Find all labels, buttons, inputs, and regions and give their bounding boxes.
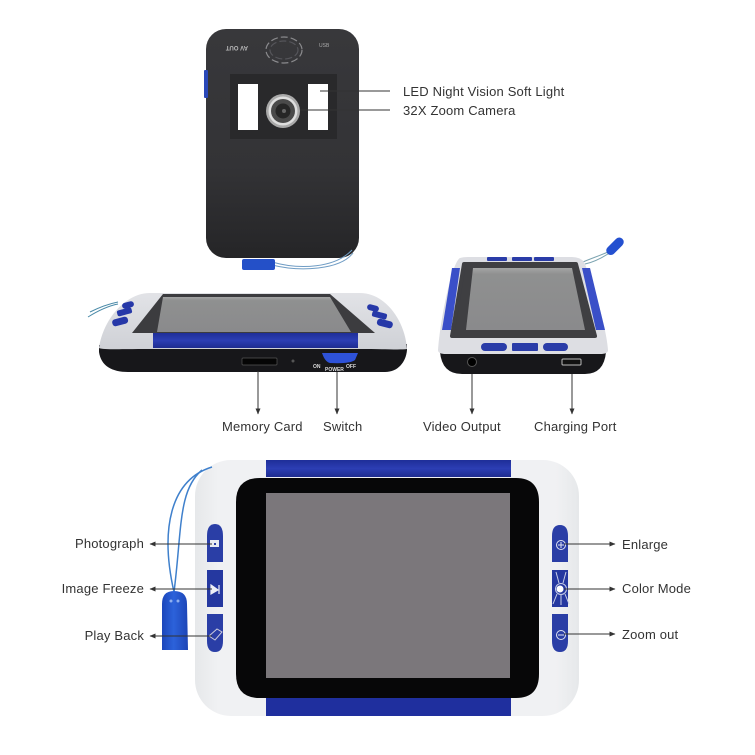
buttons — [481, 257, 568, 351]
label: Image Freeze: Image Freeze — [62, 581, 144, 596]
arrow: photograph — [150, 543, 212, 545]
arrow: memory card — [257, 371, 259, 414]
device: side view: ON — [313, 364, 321, 370]
label: Switch: Switch — [323, 419, 362, 434]
speaker grille — [266, 37, 302, 63]
label: Charging Port: Charging Port — [534, 419, 617, 434]
LED right — [308, 84, 328, 130]
audio jack — [468, 358, 476, 366]
device: side view — [88, 293, 407, 373]
icon: color mode — [553, 572, 569, 605]
icon: zoom out — [556, 630, 566, 640]
label: Memory Card: Memory Card — [222, 419, 303, 434]
device: front view — [162, 460, 579, 716]
side buttons — [111, 301, 394, 329]
icon: play back — [209, 629, 222, 640]
device: front end view — [438, 236, 626, 374]
side button strip — [204, 70, 208, 98]
arrow: switch — [336, 372, 338, 414]
arrow: color mode — [564, 588, 615, 590]
arrow: zoom out — [564, 633, 615, 635]
usb port — [562, 359, 581, 365]
power switch — [322, 353, 358, 363]
label: 32X Zoom Camera: 32X Zoom Camera — [403, 103, 516, 118]
icon: back strap — [242, 250, 353, 270]
icon: photograph — [210, 540, 219, 547]
screen — [266, 493, 510, 678]
lanyard — [168, 467, 212, 592]
label: Photograph: Photograph — [75, 536, 144, 551]
label: Video Output: Video Output — [423, 419, 501, 434]
top blue band — [266, 460, 511, 477]
device: back view — [204, 29, 359, 258]
port labels — [225, 43, 330, 50]
port labels: AV OUT — [225, 44, 248, 50]
label: LED Night Vision Soft Light: LED Night Vision Soft Light — [403, 84, 565, 99]
bottom blue band — [266, 698, 511, 716]
label: Enlarge: Enlarge — [622, 537, 668, 552]
LED left — [238, 84, 258, 130]
body — [195, 460, 579, 716]
callout: camera line — [300, 109, 390, 111]
right buttons — [552, 525, 569, 652]
port labels: USB — [319, 43, 330, 49]
label: Play Back: Play Back — [85, 628, 144, 643]
arrow: charging port — [571, 374, 573, 414]
icon: enlarge — [556, 540, 566, 550]
camera panel — [230, 74, 337, 139]
arrow: video output — [471, 374, 473, 414]
arrow: play back — [150, 635, 212, 637]
icon: strap cap — [604, 236, 626, 257]
icon: image freeze — [211, 585, 219, 594]
arrow: image freeze — [150, 588, 212, 590]
left buttons — [207, 524, 223, 652]
callout: LED line — [320, 90, 390, 92]
device: side view: OFF — [346, 364, 356, 370]
bezel — [236, 478, 539, 698]
device: side view: POWER — [325, 367, 344, 373]
memory card slot — [242, 358, 277, 365]
icon: lanyard cap — [162, 591, 188, 650]
arrow: enlarge — [564, 543, 615, 545]
label: Color Mode: Color Mode — [622, 581, 691, 596]
label: Zoom out: Zoom out — [622, 627, 679, 642]
camera lens — [266, 94, 300, 128]
